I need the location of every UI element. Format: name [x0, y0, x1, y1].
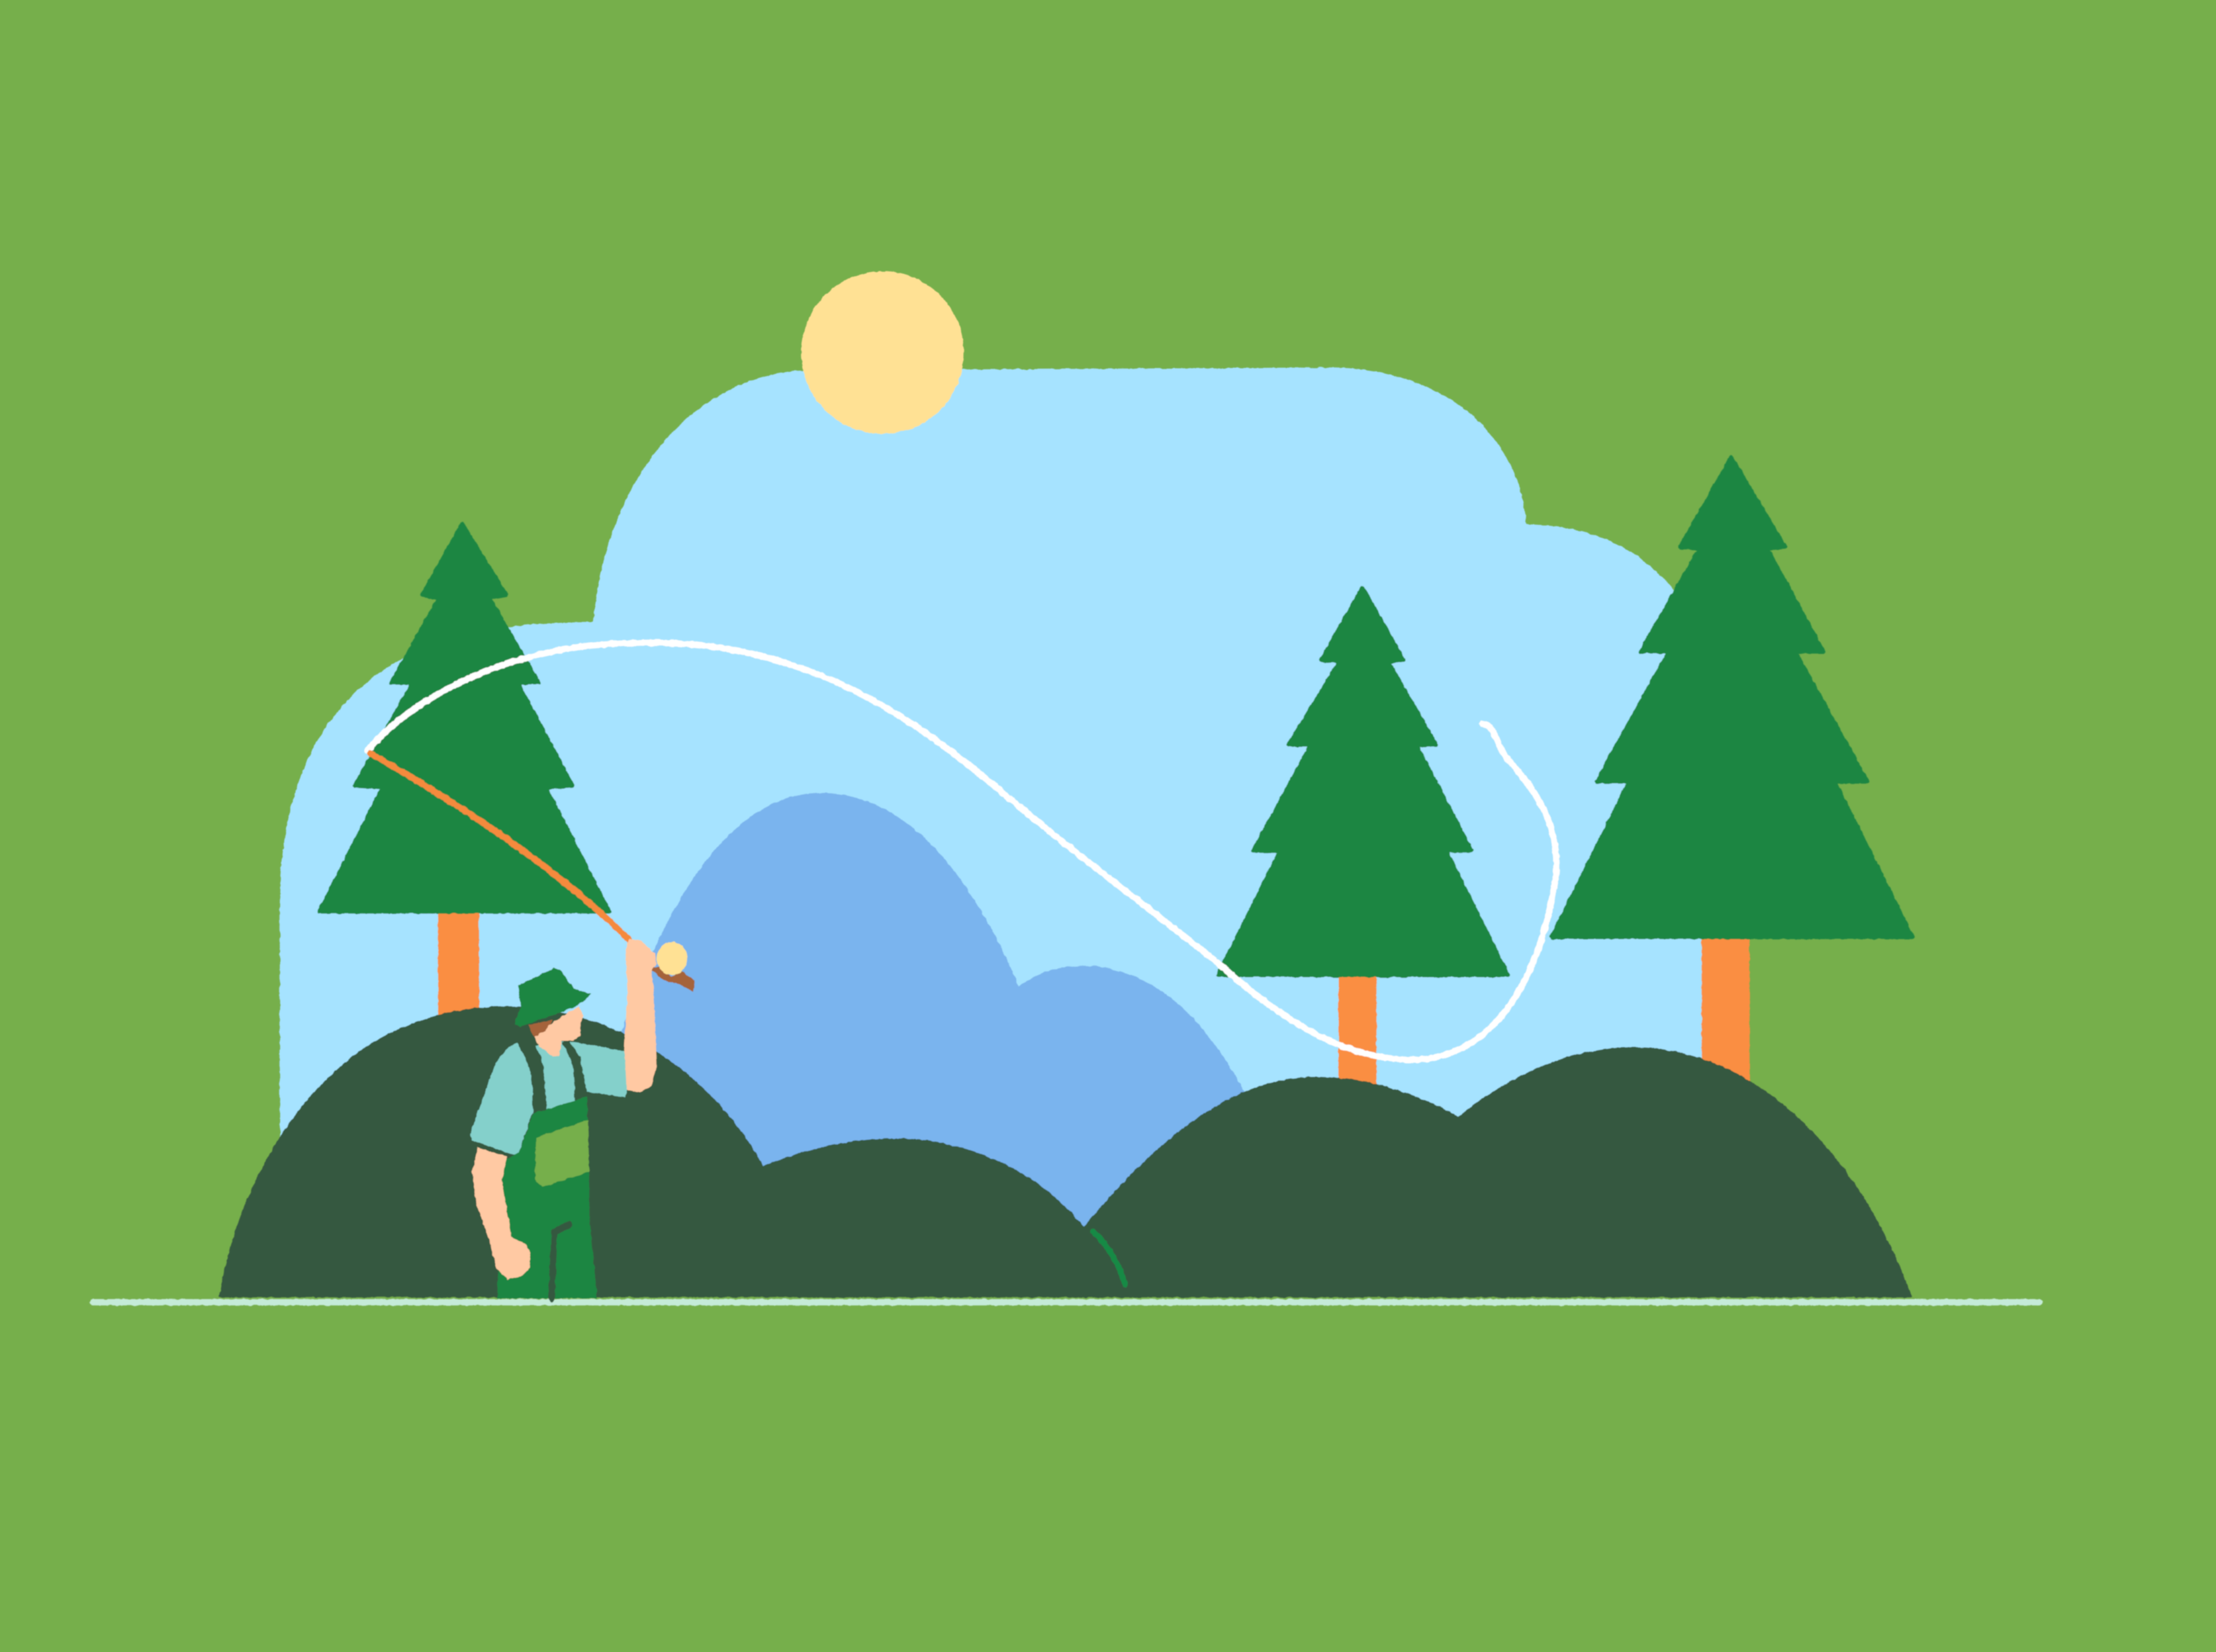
trouser leg line	[551, 1224, 569, 1299]
hanging arm	[472, 1148, 531, 1279]
white fly line	[367, 643, 1557, 1060]
ground line	[93, 1301, 2039, 1304]
overalls pocket	[535, 1120, 589, 1187]
scene	[93, 271, 2039, 1303]
grass blade	[1093, 1231, 1125, 1285]
trunk right	[1702, 930, 1749, 1093]
suspender left	[518, 1032, 547, 1115]
hat	[514, 968, 591, 1027]
face and neck	[534, 1007, 584, 1056]
trunk middle	[1338, 968, 1377, 1095]
trunk left	[438, 905, 479, 1025]
foliage left	[320, 524, 609, 911]
tree right	[1551, 458, 1912, 1093]
sun	[802, 271, 964, 434]
tree middle	[1219, 588, 1508, 1095]
hair	[528, 1020, 553, 1036]
foliage right	[1551, 458, 1912, 937]
dark green hills	[219, 1006, 1912, 1297]
foliage middle	[1219, 588, 1508, 975]
orange fishing rod	[370, 753, 629, 940]
suspender right	[561, 1040, 587, 1102]
rod handle	[649, 966, 695, 992]
sky cloud shape	[280, 367, 1731, 1145]
tree left	[320, 524, 609, 1025]
distant blue mountains	[616, 793, 1246, 1272]
raised arm	[624, 939, 657, 1092]
left shirt sleeve and torso	[470, 1041, 630, 1155]
fisher figure	[470, 939, 695, 1299]
overalls	[498, 1097, 597, 1299]
fly ball	[657, 942, 688, 975]
